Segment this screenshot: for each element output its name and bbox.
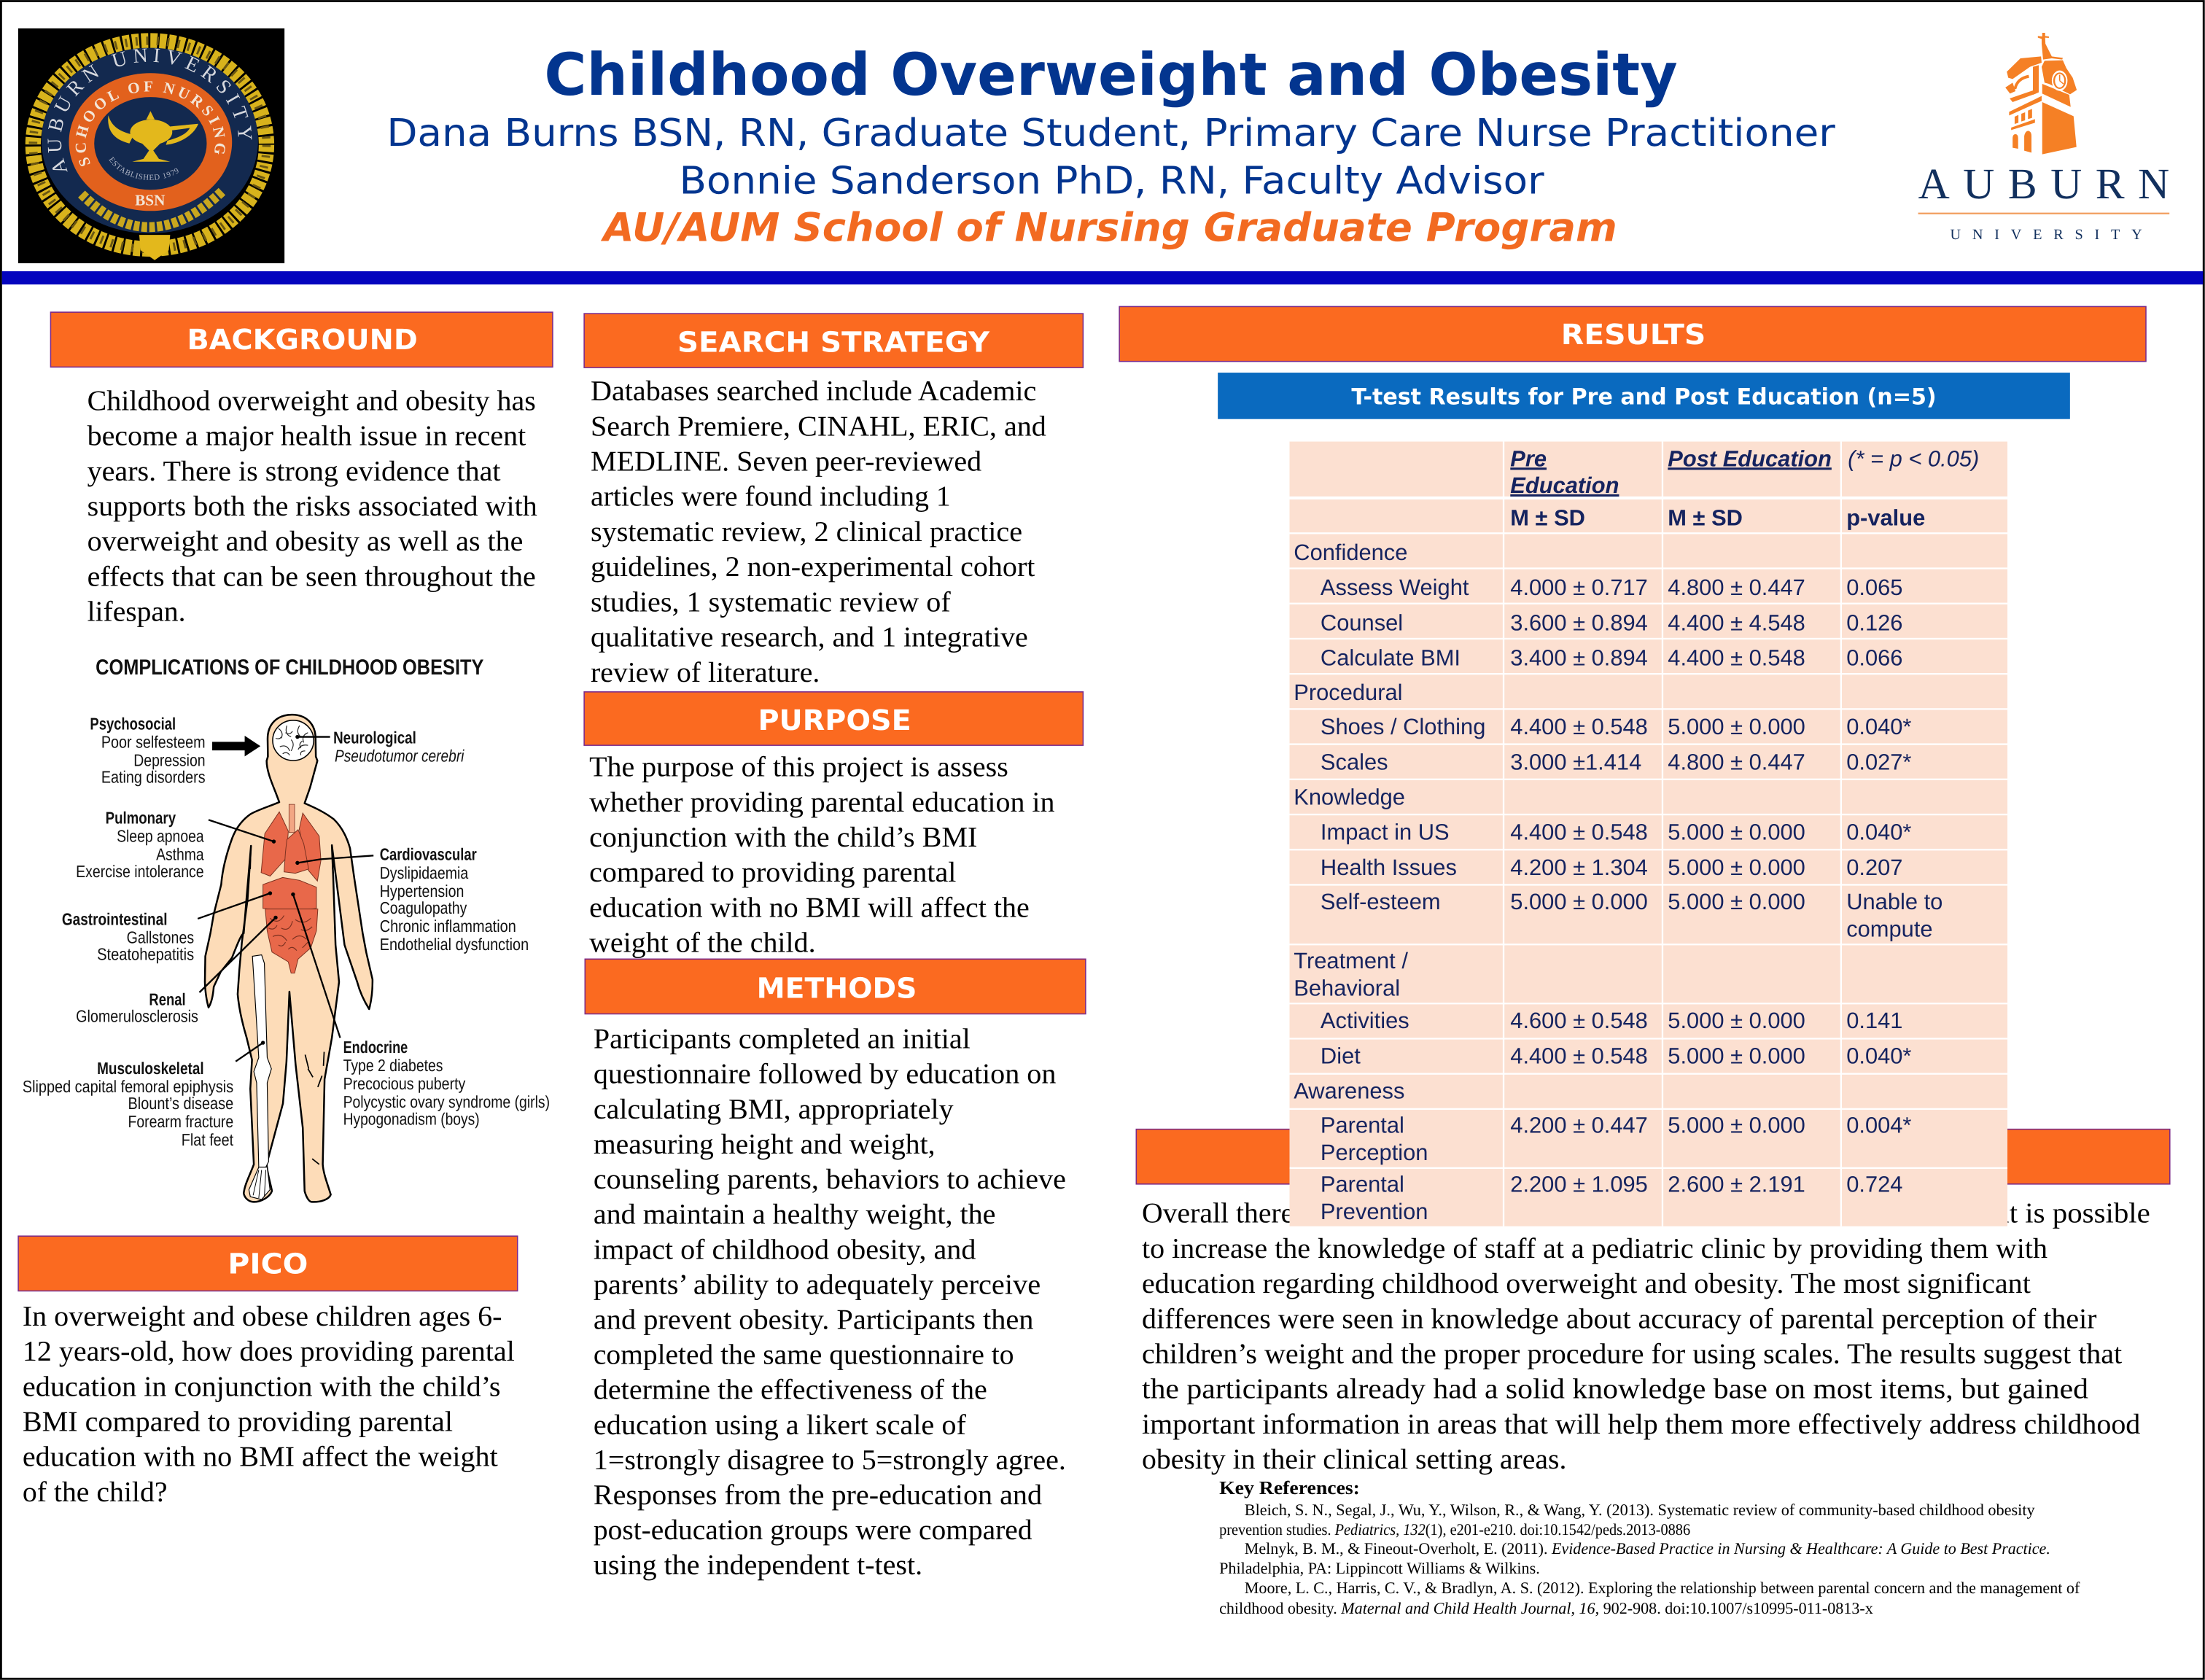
results table: Education bbox=[1510, 475, 1619, 499]
results table: 5.000 ± 0.000 bbox=[1668, 857, 1805, 881]
labels: complications: Hypertension bbox=[380, 882, 464, 901]
labels: complications: Slipped capital femoral epiphysis bbox=[23, 1077, 233, 1097]
text: search strategy bbox=[591, 376, 1046, 688]
heading: results: RESULTS bbox=[1561, 317, 1706, 351]
text: methods: and prevent obesity. Participants then bbox=[594, 1305, 1034, 1336]
labels: complications: Steatohepatitis bbox=[97, 944, 194, 964]
labels: complications: Blount’s disease bbox=[128, 1094, 234, 1113]
text: background: become a major health issue in recent bbox=[88, 421, 526, 452]
labels: complications: Poor selfesteem bbox=[101, 732, 206, 752]
results table: Parental bbox=[1321, 1173, 1404, 1197]
heading: purpose bbox=[584, 692, 1083, 745]
text: purpose bbox=[589, 752, 1054, 959]
text: search strategy: MEDLINE. Seven peer-reviewed bbox=[591, 447, 981, 478]
text: methods: post-education groups were compared bbox=[594, 1515, 1032, 1547]
text: conclusions: the participants already had a solid knowledge base on most items, but gained bbox=[1142, 1374, 2088, 1405]
text: methods: Participants completed an initial bbox=[594, 1024, 971, 1055]
text: methods: using the independent t-test. bbox=[594, 1550, 922, 1582]
key references: childhood obesity. Maternal and Child Health Journal, 16, 902-908. doi:10.1007/s10995-011-0813-x bbox=[1219, 1600, 1873, 1618]
key references bbox=[1219, 1477, 2080, 1618]
results table: Unable to bbox=[1846, 891, 1942, 915]
heading: search strategy bbox=[584, 314, 1083, 368]
results table: 0.065 bbox=[1846, 577, 1903, 601]
results table: 5.000 ± 0.000 bbox=[1668, 891, 1805, 915]
nursing school badge logo bbox=[18, 28, 284, 264]
results table: Impact in US bbox=[1321, 822, 1450, 845]
figure: complications of childhood obesity bbox=[23, 656, 550, 1202]
text: methods: 1=strongly disagree to 5=strongly agree. bbox=[594, 1445, 1066, 1477]
text: methods: Responses from the pre-education and bbox=[594, 1480, 1042, 1512]
results table: 0.066 bbox=[1846, 648, 1903, 671]
text: methods: measuring height and weight, bbox=[594, 1129, 936, 1161]
panel: background bbox=[50, 312, 553, 628]
title block: Bonnie Sanderson PhD, RN, Faculty Advisor bbox=[680, 160, 1545, 203]
text: methods: completed the same questionnaire to bbox=[594, 1340, 1014, 1371]
results table: 0.126 bbox=[1846, 612, 1903, 636]
results table: Post Education bbox=[1668, 448, 1832, 472]
results table: 2.600 ± 2.191 bbox=[1668, 1173, 1805, 1197]
heading: methods bbox=[585, 959, 1086, 1014]
heading: purpose: PURPOSE bbox=[758, 703, 911, 737]
heading: background bbox=[50, 312, 553, 367]
text: conclusions: education regarding childhood overweight and obesity. The most significant bbox=[1142, 1269, 2031, 1300]
results table: Treatment / bbox=[1294, 950, 1409, 974]
labels: complications: Musculoskeletal bbox=[97, 1059, 204, 1078]
results table: 0.141 bbox=[1846, 1010, 1903, 1034]
results table: 0.040* bbox=[1846, 1045, 1911, 1069]
text: background: years. There is strong evidence that bbox=[88, 456, 501, 487]
labels: complications: Gallstones bbox=[127, 928, 194, 947]
text: conclusions: Overall there bbox=[1142, 1199, 1294, 1229]
text: PICO question bbox=[23, 1302, 516, 1509]
labels: complications: Neurological bbox=[333, 728, 416, 747]
Auburn University logo: AUBURN bbox=[1918, 159, 2169, 208]
text: conclusions: obesity in their clinical setting areas. bbox=[1142, 1444, 1566, 1476]
results table: Behavioral bbox=[1294, 977, 1400, 1001]
results table: Diet bbox=[1321, 1045, 1361, 1069]
text: background: lifespan. bbox=[88, 597, 186, 628]
results table: 4.800 ± 0.447 bbox=[1668, 577, 1805, 601]
heading: search strategy: SEARCH STRATEGY bbox=[677, 325, 990, 359]
results table: 5.000 ± 0.000 bbox=[1510, 891, 1648, 915]
results table: Perception bbox=[1321, 1142, 1428, 1166]
heading: results bbox=[1119, 306, 2146, 362]
text: methods bbox=[594, 1024, 1066, 1582]
key references: Melnyk, B. M., & Fineout-Overholt, E. (2011). Evidence-Based Practice in Nursing & Healthcare: A Guide to Best Practice. bbox=[1245, 1540, 2050, 1558]
results table: 4.000 ± 0.717 bbox=[1510, 577, 1648, 601]
results table: p-value bbox=[1846, 507, 1925, 531]
panel: PICO bbox=[18, 1236, 518, 1509]
labels: complications: Exercise intolerance bbox=[76, 862, 204, 882]
key references: Moore, L. C., Harris, C. V., & Bradlyn, A. S. (2012). Exploring the relationship between parental concern and the management of bbox=[1245, 1579, 2080, 1598]
text: purpose: compared to providing parental bbox=[589, 858, 957, 889]
key references: Key References: bbox=[1219, 1477, 1360, 1498]
results table: Activities bbox=[1321, 1010, 1409, 1034]
labels: complications: Dyslipidaemia bbox=[380, 863, 469, 883]
text: search strategy: articles were found including 1 bbox=[591, 482, 951, 513]
results table: 5.000 ± 0.000 bbox=[1668, 1114, 1805, 1138]
text: methods: determine the effectiveness of the bbox=[594, 1375, 987, 1406]
heading: background: BACKGROUND bbox=[187, 323, 418, 357]
text: purpose: weight of the child. bbox=[589, 928, 816, 959]
labels: complications: Flat feet bbox=[182, 1130, 234, 1150]
figure: complications of childhood obesity: COMPLICATIONS OF CHILDHOOD OBESITY bbox=[96, 656, 485, 680]
Auburn University logo bbox=[1918, 33, 2169, 244]
results table: M ± SD bbox=[1510, 507, 1585, 531]
labels: complications: Asthma bbox=[156, 844, 204, 864]
text: PICO question: 12 years-old, how does providing parental bbox=[23, 1337, 516, 1368]
text: PICO question: education with no BMI affect the weight bbox=[23, 1442, 498, 1473]
text: methods: parents’ ability to adequately perceive bbox=[594, 1270, 1041, 1301]
labels: complications: Depression bbox=[133, 750, 206, 770]
blue divider bar bbox=[2, 271, 2203, 284]
title block: Childhood Overweight and Obesity bbox=[544, 40, 1678, 109]
results table: 3.400 ± 0.894 bbox=[1510, 648, 1648, 671]
results table: 3.000 ±1.414 bbox=[1510, 751, 1641, 775]
labels: complications: Psychosocial bbox=[90, 714, 176, 734]
labels: complications: Glomerulosclerosis bbox=[76, 1006, 198, 1026]
results table: Health Issues bbox=[1321, 857, 1457, 881]
results table: (* = p < 0.05) bbox=[1848, 448, 1979, 472]
title block: AU/AUM School of Nursing Graduate Program bbox=[600, 205, 1617, 251]
results table: Assess Weight bbox=[1321, 577, 1470, 601]
labels: complications: Eating disorders bbox=[101, 767, 206, 787]
text: methods: education using a likert scale of bbox=[594, 1410, 966, 1442]
results table: 5.000 ± 0.000 bbox=[1668, 1010, 1805, 1034]
text: methods: impact of childhood obesity, and bbox=[594, 1235, 976, 1266]
results table: 4.400 ± 0.548 bbox=[1510, 716, 1648, 740]
text: search strategy: Search Premiere, CINAHL, ERIC, and bbox=[591, 411, 1046, 443]
panel: methods bbox=[585, 959, 1086, 1582]
text: background: Childhood overweight and obesity has bbox=[88, 386, 536, 417]
text: purpose: conjunction with the child’s BMI bbox=[589, 822, 978, 854]
text: background bbox=[88, 386, 537, 628]
text: search strategy: Databases searched include Academic bbox=[591, 376, 1036, 408]
Auburn University logo: UNIVERSITY bbox=[1951, 228, 2143, 244]
title block: Dana Burns BSN, RN, Graduate Student, Primary Care Nurse Practitioner bbox=[386, 112, 1837, 155]
labels: complications: Pulmonary bbox=[106, 808, 176, 828]
results table: 4.400 ± 0.548 bbox=[1668, 648, 1805, 671]
key references: Bleich, S. N., Segal, J., Wu, Y., Wilson, R., & Wang, Y. (2013). Systematic review of community-based childhood obesity bbox=[1245, 1501, 2035, 1520]
text: PICO question: BMI compared to providing parental bbox=[23, 1407, 454, 1438]
key references: Philadelphia, PA: Lippincott Williams & Wilkins. bbox=[1219, 1560, 1540, 1578]
arrow: psychosocial to head bbox=[212, 736, 260, 756]
labels: complications: Polycystic ovary syndrome (girls) bbox=[343, 1092, 550, 1112]
text: background: overweight and obesity as well as the bbox=[88, 526, 523, 558]
heading: PICO bbox=[18, 1236, 518, 1291]
results table: 5.000 ± 0.000 bbox=[1668, 1045, 1805, 1069]
text: search strategy: systematic review, 2 clinical practice bbox=[591, 517, 1022, 548]
table title bar bbox=[1218, 373, 2070, 419]
text: purpose: education with no BMI will affect the bbox=[589, 893, 1030, 924]
heading: methods: METHODS bbox=[757, 971, 917, 1005]
text: background: supports both the risks associated with bbox=[88, 491, 537, 523]
labels: complications: Precocious puberty bbox=[343, 1074, 465, 1094]
results table: 4.800 ± 0.447 bbox=[1668, 751, 1805, 775]
text: purpose: whether providing parental education in bbox=[589, 788, 1054, 818]
nursing school badge logo: AUBURN UNIVERSITY bbox=[47, 48, 252, 172]
text: search strategy: qualitative research, and 1 integrative bbox=[591, 623, 1028, 653]
results table bbox=[1289, 442, 2007, 1226]
results table: Counsel bbox=[1321, 612, 1403, 636]
text: PICO question: education in conjunction with the child’s bbox=[23, 1372, 501, 1403]
results table: 4.400 ± 0.548 bbox=[1510, 822, 1648, 845]
results table: Shoes / Clothing bbox=[1321, 716, 1485, 740]
results table: 0.040* bbox=[1846, 822, 1911, 845]
panel: conclusions (heading band partly covered by table) bbox=[1136, 1129, 2170, 1476]
labels: complications: Cardiovascular bbox=[380, 844, 477, 864]
results table: Parental bbox=[1321, 1114, 1404, 1138]
results table: 0.207 bbox=[1846, 857, 1903, 881]
text: methods: counseling parents, behaviors to achieve bbox=[594, 1164, 1066, 1196]
labels: complications: Forearm fracture bbox=[128, 1112, 234, 1132]
nursing school badge logo: BSN bbox=[135, 192, 166, 209]
labels: complications: Pseudotumor cerebri bbox=[335, 746, 464, 766]
text: conclusions: important information in areas that will help them more effectively address childhood bbox=[1142, 1409, 2140, 1441]
leader lines bbox=[198, 735, 373, 1062]
labels: complications: Endothelial dysfunction bbox=[380, 935, 529, 954]
panel: results bbox=[1119, 306, 2146, 1226]
text: conclusions: children’s weight and the proper procedure for using scales. The results suggest that bbox=[1142, 1339, 2123, 1370]
heading: PICO: PICO bbox=[228, 1247, 308, 1280]
results table: 0.004* bbox=[1846, 1114, 1911, 1138]
results table: 2.200 ± 1.095 bbox=[1510, 1173, 1648, 1197]
text: search strategy: guidelines, 2 non-experimental cohort bbox=[591, 552, 1035, 583]
panel: purpose bbox=[584, 692, 1083, 959]
text: search strategy: review of literature. bbox=[591, 658, 820, 688]
results table: 0.040* bbox=[1846, 716, 1911, 740]
body illustration bbox=[205, 715, 373, 1202]
text: background: effects that can be seen throughout the bbox=[88, 562, 536, 593]
results table: 4.200 ± 1.304 bbox=[1510, 857, 1648, 881]
text: methods: and maintain a healthy weight, the bbox=[594, 1199, 995, 1231]
results table: 0.724 bbox=[1846, 1173, 1903, 1197]
text: methods: calculating BMI, appropriately bbox=[594, 1094, 954, 1126]
labels: complications: Coagulopathy bbox=[380, 898, 467, 918]
text: conclusions: to increase the knowledge of staff at a pediatric clinic by providing them with bbox=[1142, 1234, 2048, 1265]
text: PICO question: In overweight and obese children ages 6- bbox=[23, 1302, 502, 1333]
results table: Procedural bbox=[1294, 682, 1403, 706]
results table: Prevention bbox=[1321, 1201, 1428, 1225]
results table: Pre bbox=[1510, 448, 1547, 472]
text: conclusions: differences were seen in knowledge about accuracy of parental perception of their bbox=[1142, 1304, 2097, 1335]
results table: Calculate BMI bbox=[1321, 648, 1461, 671]
key references: prevention studies. Pediatrics, 132(1), e201-e210. doi:10.1542/peds.2013-0886 bbox=[1219, 1521, 1690, 1539]
labels: complications: Hypogonadism (boys) bbox=[343, 1109, 480, 1129]
results table: 5.000 ± 0.000 bbox=[1668, 822, 1805, 845]
panel: search strategy bbox=[584, 314, 1083, 688]
text: PICO question: of the child? bbox=[23, 1477, 168, 1509]
results table: Scales bbox=[1321, 751, 1388, 775]
results table: Awareness bbox=[1294, 1081, 1404, 1104]
results table: M ± SD bbox=[1668, 507, 1743, 531]
text: search strategy: studies, 1 systematic review of bbox=[591, 588, 951, 618]
nursing school badge logo: ESTABLISHED 1979 bbox=[109, 156, 179, 180]
title block bbox=[386, 40, 1837, 251]
results table: 4.400 ± 0.548 bbox=[1510, 1045, 1648, 1069]
results table: 4.200 ± 0.447 bbox=[1510, 1114, 1648, 1138]
labels: complications: Chronic inflammation bbox=[380, 917, 516, 936]
results table: Self-esteem bbox=[1321, 891, 1441, 915]
results table: 0.027* bbox=[1846, 751, 1911, 775]
labels: complications: Renal bbox=[149, 989, 186, 1009]
labels: complications: Endocrine bbox=[343, 1038, 408, 1057]
results table: Confidence bbox=[1294, 542, 1408, 566]
text: methods: questionnaire followed by education on bbox=[594, 1059, 1056, 1090]
results table: 3.600 ± 0.894 bbox=[1510, 612, 1648, 636]
text: conclusions bbox=[1142, 1199, 2150, 1476]
results table: 4.600 ± 0.548 bbox=[1510, 1010, 1648, 1034]
labels: complications: Gastrointestinal bbox=[62, 909, 168, 929]
labels: complications: Type 2 diabetes bbox=[343, 1056, 443, 1076]
text: purpose: The purpose of this project is assess bbox=[589, 752, 1008, 783]
results table: compute bbox=[1846, 918, 1933, 942]
results table: 4.400 ± 4.548 bbox=[1668, 612, 1805, 636]
results table: 5.000 ± 0.000 bbox=[1668, 716, 1805, 740]
labels: complications: Sleep apnoea bbox=[117, 826, 204, 846]
text: conclusions: it is possible bbox=[2001, 1199, 2150, 1229]
labels: complications bbox=[23, 714, 550, 1150]
table title bar: T-test Results for Pre and Post Education (n=5) bbox=[1351, 384, 1937, 410]
nursing school badge logo: SCHOOL OF NURSING bbox=[76, 82, 225, 166]
results table: Knowledge bbox=[1294, 786, 1405, 810]
